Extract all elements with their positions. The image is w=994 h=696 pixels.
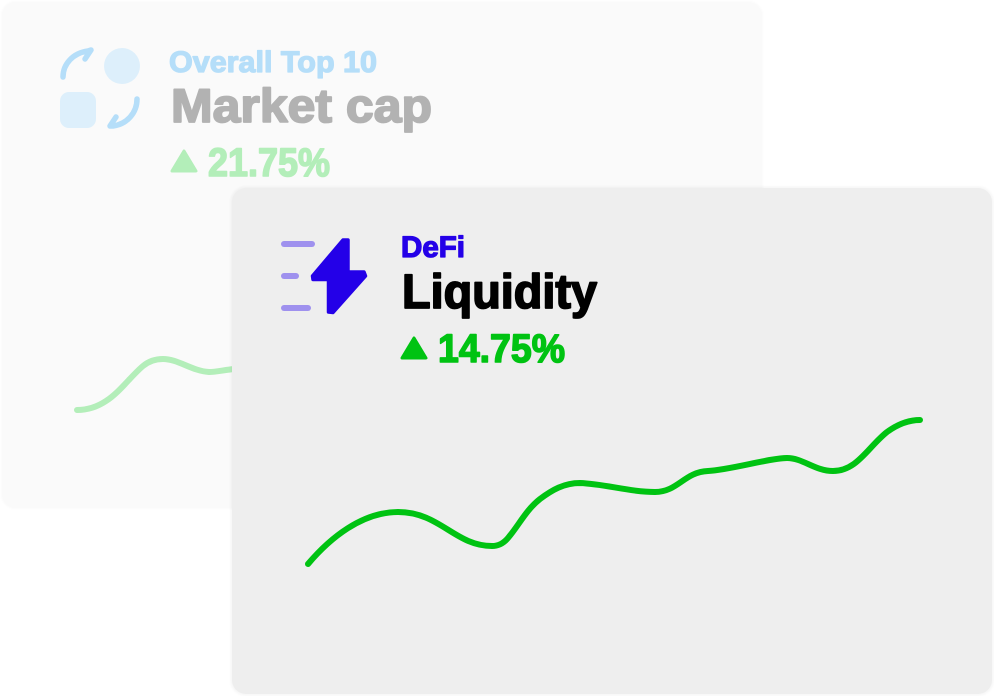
icon: up triangle: [402, 338, 426, 358]
value: 14.75%: 14.75%: [438, 327, 565, 371]
category label: DeFi: DeFi: [401, 231, 465, 264]
icon: up triangle: [172, 151, 196, 171]
category label: Overall Top 10: Overall Top 10: [169, 46, 377, 79]
icon: market cap shapes: [60, 48, 140, 128]
heading: Liquidity: Liquidity: [402, 266, 597, 319]
line chart: liquidity trend: [308, 420, 920, 564]
icon: lightning bolt with speed lines: [281, 240, 366, 312]
value: 21.75%: 21.75%: [208, 141, 330, 185]
heading: Market cap: Market cap: [171, 79, 432, 132]
panel: DeFi liquidity: [230, 186, 994, 696]
line chart: market cap trend: [77, 359, 234, 410]
panel: overall top 10 market cap: [1, 1, 763, 509]
